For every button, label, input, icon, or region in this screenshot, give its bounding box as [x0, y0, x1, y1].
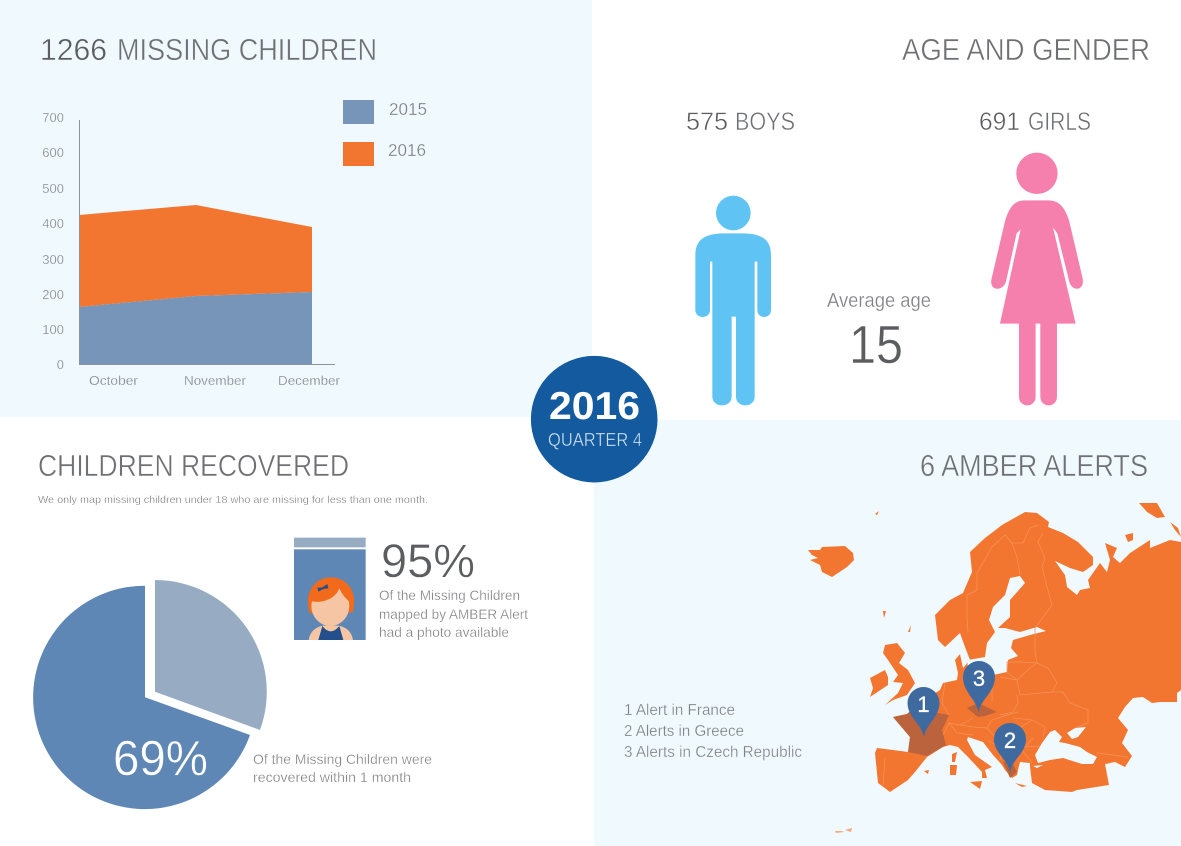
y axis labels: 300 — [42, 252, 64, 267]
x axis labels: November — [184, 373, 247, 388]
y axis labels — [42, 110, 64, 372]
label: 691 girls: 691 — [979, 108, 1020, 136]
highlighted country: France — [893, 708, 949, 756]
highlighted country: Greece — [1003, 762, 1017, 778]
stat: 95 percent — [379, 534, 528, 640]
slice: 69 percent — [33, 586, 250, 809]
panel: age and gender — [686, 32, 1150, 405]
seas — [967, 576, 1097, 768]
heading: 1266 missing children — [40, 32, 377, 67]
alert list: 1 Alert in France — [624, 702, 735, 719]
badge: 2016 quarter 4: QUARTER 4 — [548, 430, 642, 450]
y axis labels: 200 — [42, 287, 64, 302]
stat: 95 percent: Of the Missing Children — [379, 587, 520, 603]
heading: 6 amber alerts: 6 AMBER ALERTS — [920, 448, 1148, 483]
x axis labels: October — [89, 373, 139, 388]
y axis labels: 600 — [42, 145, 64, 160]
label: 69%: 69% — [113, 732, 208, 786]
label: 575 boys: 575 — [686, 108, 728, 136]
legend: 2015 — [389, 99, 427, 119]
area chart — [42, 110, 341, 388]
heading: 1266 missing children: 1266 — [40, 32, 107, 67]
country borders — [883, 525, 1128, 785]
caption: recovered within 1 month: Of the Missing Children were — [253, 751, 432, 767]
text: average age: Average age — [827, 290, 931, 312]
panel: children recovered — [33, 448, 528, 809]
y axis labels: 100 — [42, 322, 64, 337]
panel: missing children — [0, 0, 592, 417]
slice: remaining — [155, 580, 267, 730]
stat: 95 percent: 95% — [381, 534, 475, 587]
badge: 2016 quarter 4 — [531, 356, 658, 483]
heading: 1266 missing children: MISSING CHILDREN — [117, 32, 377, 67]
stat: 95 percent: had a photo available — [379, 624, 509, 640]
heading: age and gender: AGE AND GENDER — [902, 32, 1150, 67]
pin 2: 2 — [1004, 728, 1016, 753]
pin 1: 1 — [917, 692, 930, 717]
area: 2016 — [79, 205, 312, 307]
pie chart — [33, 580, 267, 809]
text: average age: 15 — [849, 315, 903, 375]
heading: children recovered: CHILDREN RECOVERED — [38, 448, 349, 483]
panel: amber alerts — [594, 420, 1181, 846]
icon: girl — [991, 153, 1083, 405]
badge: 2016 quarter 4: 2016 — [549, 385, 640, 428]
pin 3 — [963, 661, 995, 712]
alert list: 3 Alerts in Czech Republic — [624, 744, 802, 761]
label: 575 boys — [686, 108, 795, 136]
y axis labels: 700 — [42, 110, 64, 125]
y axis labels: 400 — [42, 216, 64, 231]
label: 691 girls — [979, 108, 1091, 136]
caption: recovered within 1 month — [253, 751, 432, 785]
x axis labels — [89, 373, 341, 388]
legend: 2016 — [388, 140, 426, 160]
y axis labels: 0 — [57, 357, 64, 372]
caption: recovered within 1 month: recovered within 1 month — [253, 769, 411, 785]
text: average age — [827, 290, 931, 375]
label: 691 girls: GIRLS — [1028, 108, 1091, 136]
stat: 95 percent: mapped by AMBER Alert — [379, 606, 528, 622]
map of Europe — [808, 503, 1181, 833]
alert list: 2 Alerts in Greece — [624, 723, 744, 740]
icon: child photo — [294, 538, 366, 640]
pin 3: 3 — [973, 666, 985, 691]
y axis labels: 500 — [42, 181, 64, 196]
pin 1 — [908, 687, 940, 737]
highlighted country: Czech Republic — [967, 703, 997, 717]
x axis labels: December — [278, 373, 341, 388]
area: 2015 — [79, 292, 312, 364]
legend — [343, 99, 427, 166]
icon: boy — [695, 196, 771, 405]
alert list — [624, 702, 802, 761]
land — [808, 503, 1181, 833]
label: 575 boys: BOYS — [735, 108, 795, 136]
pin 2 — [994, 723, 1026, 772]
note: We only map missing children under 18 who are missing for less than one month. — [38, 494, 428, 506]
